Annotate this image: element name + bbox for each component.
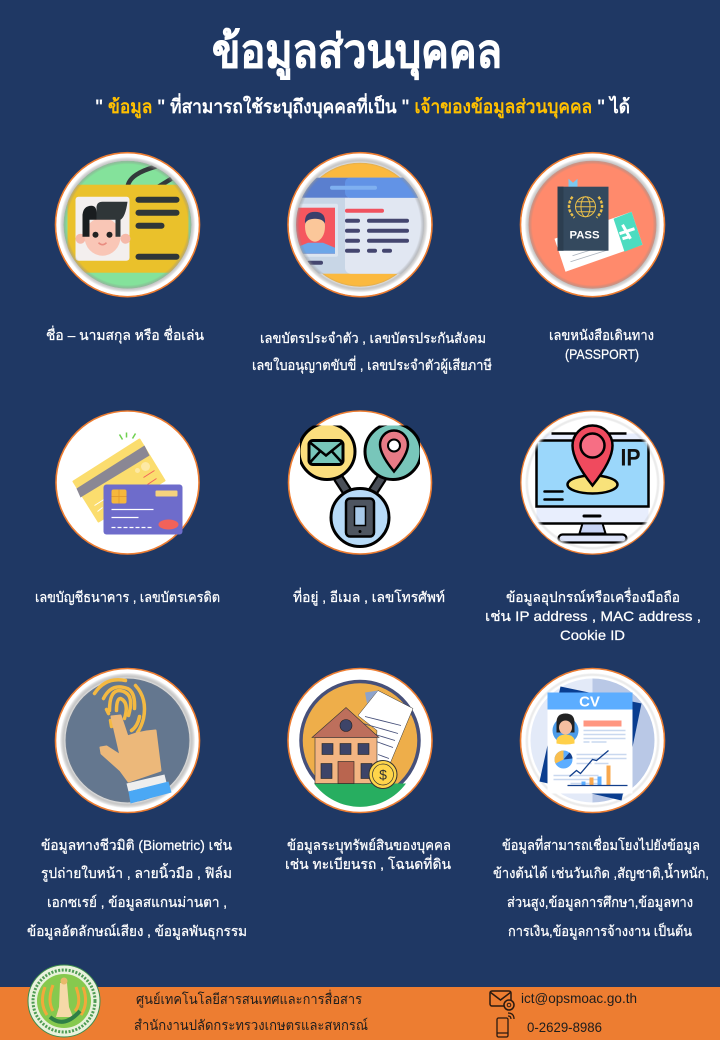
caption: ID numbers <box>252 330 492 374</box>
caption: passport: เลขหนังสือเดินทาง <box>549 327 654 343</box>
caption: device: เช่น IP address , MAC address , <box>485 608 701 624</box>
caption: property: เช่น ทะเบียนรถ , โฉนดที่ดิน <box>285 855 451 872</box>
footer: phone number: 0-2629-8986 <box>527 1019 602 1035</box>
caption: name: ชื่อ – นามสกุล หรือ ชื่อเล่น <box>46 326 204 344</box>
icon: ID card <box>288 153 432 297</box>
caption: passport <box>549 327 654 362</box>
icon: CV <box>520 668 664 812</box>
icon: IP monitor <box>521 411 664 554</box>
caption: device: ข้อมูลอุปกรณ์หรือเครื่องมือถือ <box>506 588 680 606</box>
caption: biometric: เอกซเรย์ , ข้อมูลสแกนม่านตา , <box>47 894 227 911</box>
caption: linked data: ข้อมูลที่สามารถเชื่อมโยงไปยังข้อมูล <box>502 836 700 854</box>
icon: CV: CV <box>579 694 600 710</box>
icon: ID badge <box>56 153 200 297</box>
caption: linked data: ส่วนสูง,ข้อมูลการศึกษา,ข้อมูลทาง <box>507 894 693 911</box>
icon: house and deed: $ <box>379 766 387 782</box>
icon: address email phone <box>288 411 432 554</box>
icon: passport: PASS <box>570 230 600 242</box>
icon: bank cards <box>56 411 199 554</box>
footer: organisation: ศูนย์เทคโนโลยีสารสนเทศและการสื่อสาร <box>136 990 362 1008</box>
caption: property <box>285 837 451 872</box>
caption: ID numbers: เลขบัตรประจำตัว , เลขบัตรประกันสังคม <box>260 330 486 346</box>
caption: biometric: รูปถ่ายใบหน้า , ลายนิ้วมือ , ฟิล์ม <box>41 863 232 882</box>
caption: device: Cookie ID <box>560 627 625 643</box>
icon: phone <box>497 1013 514 1037</box>
footer band <box>0 987 720 1040</box>
icon: passport <box>520 153 664 297</box>
footer: email address: ict@opsmoac.go.th <box>521 990 637 1006</box>
caption: bank: เลขบัญชีธนาคาร , เลขบัตรเครดิต <box>35 589 220 605</box>
caption: linked data <box>493 836 709 940</box>
caption: biometric <box>27 837 247 940</box>
caption: property: ข้อมูลระบุทรัพย์สินของบุคคล <box>287 837 451 854</box>
caption: linked data: ข้างต้นได้ เช่นวันเกิด ,สัญชาติ,น้ำหนัก, <box>493 863 709 881</box>
footer: organisation: สำนักงานปลัดกระทรวงเกษตรและสหกรณ์ <box>134 1017 368 1033</box>
caption: biometric: ข้อมูลอัตลักษณ์เสียง , ข้อมูลพันธุกรรม <box>27 923 247 940</box>
icon: email <box>490 991 514 1010</box>
caption: passport: (PASSPORT) <box>565 346 639 362</box>
icon: ministry logo <box>28 965 100 1037</box>
icon: house and deed <box>288 668 432 812</box>
caption: linked data: การเงิน,ข้อมูลการจ้างงาน เป็นต้น <box>508 922 692 940</box>
subtitle: " ข้อมูล " ที่สามารถใช้ระบุถึงบุคคลที่เป็น " เจ้าของข้อมูลส่วนบุคคล " ได้ <box>95 93 630 119</box>
icon: IP monitor: IP <box>620 444 640 472</box>
title: ข้อมูลส่วนบุคคล <box>212 25 502 80</box>
footer: organisation <box>134 990 368 1033</box>
caption: biometric: ข้อมูลทางชีวมิติ (Biometric) เช่น <box>41 837 232 854</box>
caption: contact: ที่อยู่ , อีเมล , เลขโทรศัพท์ <box>293 588 445 606</box>
caption: ID numbers: เลขใบอนุญาตขับขี่ , เลขประจำตัวผู้เสียภาษี <box>252 356 492 374</box>
caption: device <box>485 588 701 643</box>
icon: fingerprint <box>56 668 200 812</box>
